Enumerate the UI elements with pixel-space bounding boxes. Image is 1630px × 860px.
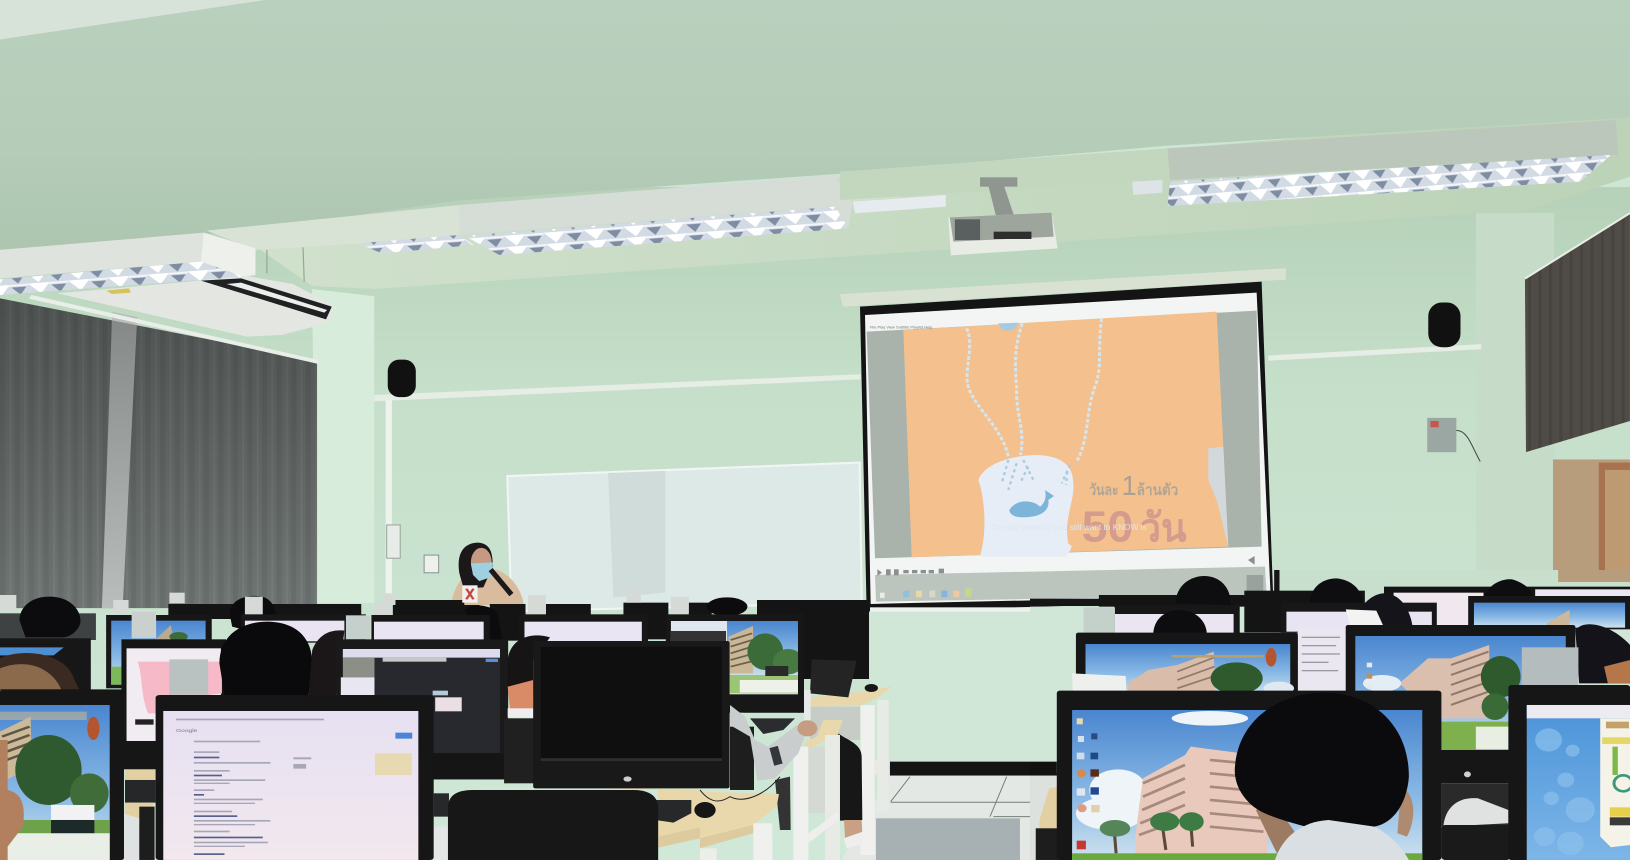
wall socket [387,525,400,558]
air conditioner [57,275,333,337]
screen frame [860,282,1273,612]
screen bottom frame [1030,570,1280,606]
second row centre paper tag [346,615,370,639]
far students heads [1175,576,1533,605]
small strip left [853,195,946,213]
desktop monitor A [1076,633,1298,696]
door [1553,459,1630,585]
screen white area [865,293,1271,604]
desktop icons [1077,718,1100,849]
seated student legs [838,733,863,848]
second row middle monitor [1281,603,1437,633]
rear desk with legs [810,687,892,855]
poster [1600,718,1630,847]
grey paper [1084,607,1115,634]
second row right monitor [1468,596,1630,629]
projector [948,213,1058,255]
caption word: ล้านตัว [1137,481,1178,499]
front left student edge [0,740,24,860]
falling drops [1002,460,1070,490]
red cross sign [462,585,478,603]
front monitor with search page [156,695,434,860]
large student head [219,622,312,695]
left curtain [0,298,317,608]
wall trim under screen [870,607,1060,612]
chair behind student [730,727,754,790]
grass [1072,853,1422,860]
centre keyboard [434,793,449,817]
conduit [386,400,392,598]
search page button [395,733,412,739]
taskbar icons [880,575,1263,598]
wall switch [424,555,439,573]
white vessel [978,455,1073,557]
grey block on video [1208,447,1228,547]
presenter [451,543,524,605]
far black monitors [1099,591,1365,632]
front desk with legs [793,720,843,860]
student in grey sweatshirt [730,705,806,781]
centre student shirt [434,827,449,860]
screen casing [840,268,1286,307]
ceiling beam [840,148,1167,200]
far grey monitor [0,613,96,640]
grey paper right [1522,647,1578,686]
front desktop monitor C [1057,691,1441,860]
large black monitor [533,641,730,788]
player controls [877,556,1255,576]
baseboard [890,762,1058,776]
second row left monitor [1114,605,1240,635]
second row paper tag [132,612,156,638]
student hand [797,720,817,736]
speaker right [1428,302,1460,347]
paper on monitor A [1072,673,1126,695]
wall right segment [1280,570,1630,607]
third row paper tag [169,659,208,695]
desktop icons B [1367,663,1372,689]
desktop monitor B [1346,625,1575,783]
front student [1235,693,1413,860]
whale [1009,490,1054,517]
cables and bag under desk [775,777,791,830]
wall rail [374,374,861,401]
keyboard near student [750,718,795,734]
lower wall strip [1030,607,1630,773]
far row white document monitor [1384,587,1630,628]
subtitle: The big question you still want to KNOW is [991,522,1147,532]
window title bar: File Play View Subtitle Playlist Help [870,324,933,329]
floor and baseboard [1030,762,1059,860]
third row left monitor [0,638,91,690]
small strip right [1132,180,1162,195]
Thai caption one: วันละ [1089,482,1119,499]
floor tiles [842,776,1058,860]
paper slips on monitors [0,590,689,615]
control box [1427,418,1480,462]
big days word: วัน [1140,507,1187,551]
beam right of fixture [837,168,900,202]
left ceiling fixtures and air conditioner [0,168,900,364]
chair behind monitor [504,718,535,783]
right curtain [1525,213,1630,452]
second row middle student [1355,593,1413,627]
second student hair [309,630,344,695]
light fixture left [0,233,255,295]
light fixture right [1167,120,1618,206]
third row pink monitor [121,639,226,769]
side wall left [312,289,374,603]
light fixture centre [459,175,852,255]
desk clutter [1441,783,1510,860]
upper left corner [0,0,265,40]
left and centre student rows [0,585,804,860]
third row dark monitor [337,639,508,779]
trim above curtain [29,295,319,364]
left keyboard and desk [122,770,156,860]
wall lines behind air conditioner [267,247,304,282]
female student right [1575,624,1630,683]
water streams [967,318,1102,462]
aisle wall [870,612,1060,762]
big days label: 50 [1082,504,1133,552]
front desktop monitor D [1508,685,1630,860]
second row monitors blank [241,614,648,643]
caption number: 1 [1122,470,1137,501]
front left desk [700,792,779,860]
mouse and cables [694,777,780,818]
far black monitors [168,600,800,641]
small light strip [359,235,474,253]
whiteboard [507,463,862,611]
front left desktop monitor [0,689,124,860]
projection screen [860,282,1273,612]
rear wall [0,187,1630,860]
second row monitor desktop [106,615,212,688]
palm trees [1100,812,1204,853]
woman head left [0,653,79,689]
desk surface [469,784,700,848]
speaker left [388,360,416,397]
middle document screen [1298,628,1346,692]
ceiling beam [207,205,459,250]
student behind with tinted hair [508,635,550,718]
grey video area [867,311,1262,558]
back space under desk [810,707,860,740]
second row right monitor [666,614,804,713]
front chair back [448,790,658,860]
right ceiling fixture and projector [840,120,1618,255]
door base [1558,570,1630,582]
ceiling soffit [0,0,1630,249]
wall rail right [1268,344,1481,361]
mouse on rear desk [865,684,878,692]
clouds [1076,711,1248,830]
second row student [1153,610,1207,633]
white paper [1346,609,1384,627]
projector mount [980,177,1017,217]
orange video frame [903,312,1228,557]
sticky box [375,753,412,775]
ceiling underside [249,109,1630,289]
search logo: Google [176,729,197,734]
right student rows [1030,570,1630,860]
blue drop top [998,323,1018,331]
laptop on desk [810,659,857,697]
far black monitor behind centre row [757,600,869,679]
keyboard [656,800,691,823]
search results [176,719,324,855]
white shirt behind monitor [804,690,811,720]
middle aisle with desks and floor [694,607,1060,860]
right column [1476,213,1554,603]
grey chair back [876,818,1020,860]
far students heads [19,596,747,640]
monitor right edge [743,613,804,713]
building [1135,747,1267,853]
grey taskbar [875,567,1267,602]
